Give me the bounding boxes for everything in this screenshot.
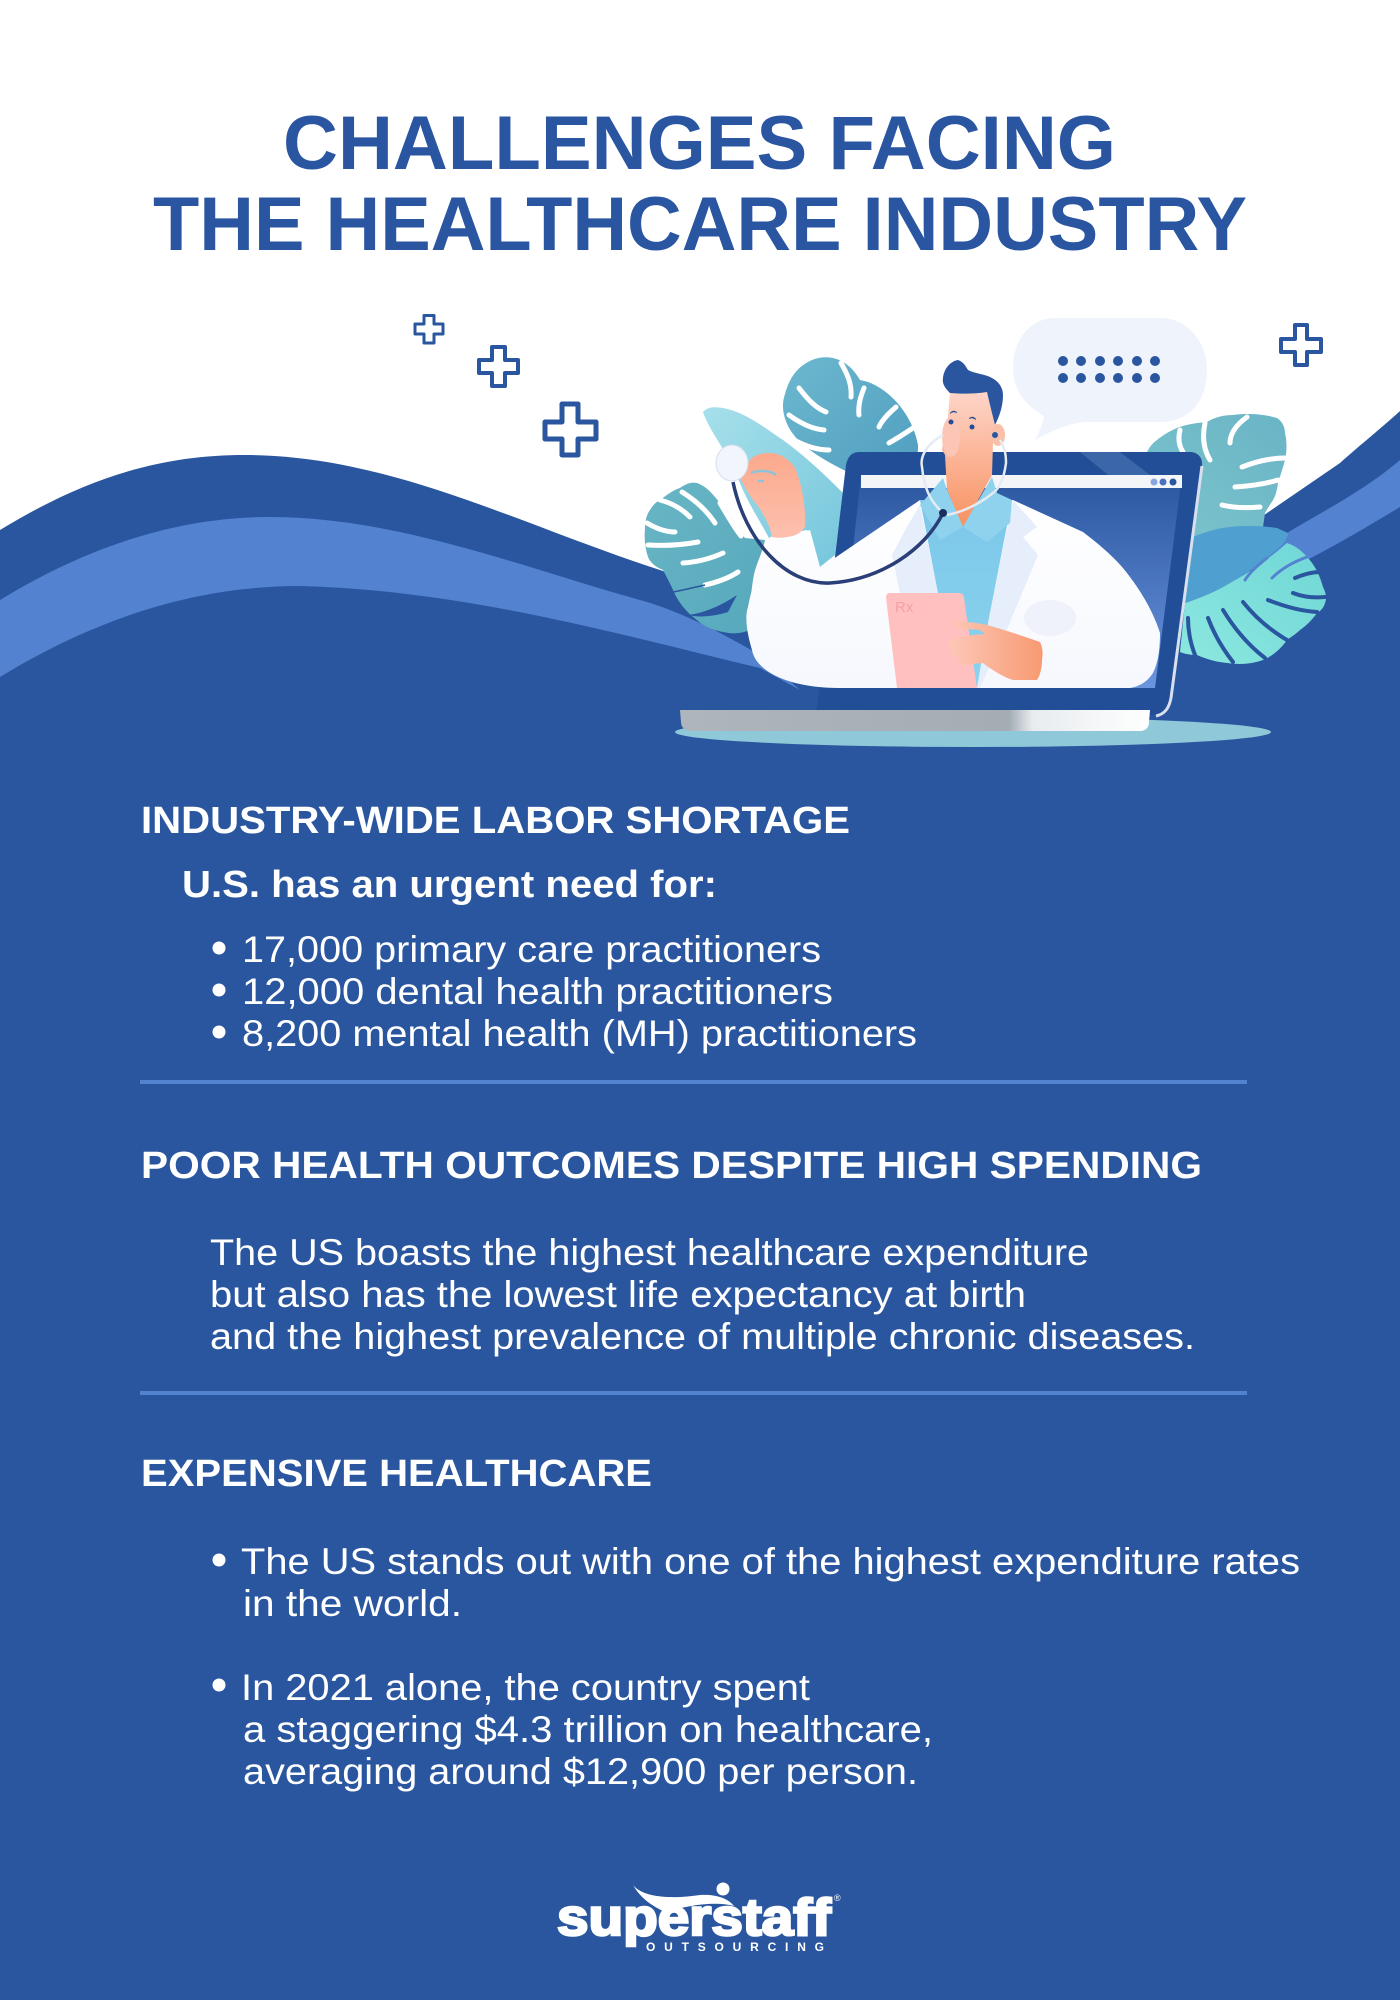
doctor (716, 360, 1160, 688)
icon: medium plus (479, 347, 518, 386)
doctor raised hand (740, 453, 805, 538)
plus icons (415, 316, 1321, 455)
clipboard (886, 593, 977, 688)
paragraph: but also has the lowest life expectancy at birth (210, 1274, 1026, 1315)
paragraph: and the highest prevalence of multiple chronic diseases. (210, 1316, 1195, 1357)
paragraph: The US boasts the highest healthcare expenditure (210, 1232, 1089, 1273)
bullet: 2021 spending: averaging around $12,900 per person. (243, 1751, 918, 1792)
bullet list: 17,000 primary care practitioners (242, 929, 821, 970)
doctor ear (991, 424, 1005, 446)
stethoscope tube (733, 482, 943, 583)
doctor eyes and brows (948, 411, 976, 430)
stethoscope chest piece (716, 445, 748, 481)
laptop base (680, 710, 1150, 731)
section: labor shortage (141, 800, 917, 1054)
doctor hair (943, 360, 1003, 425)
title: THE HEALTHCARE INDUSTRY (153, 182, 1247, 267)
laptop shadow (675, 717, 1271, 747)
bullet: 2021 spending: a staggering $4.3 trillion on healthcare, (243, 1709, 933, 1750)
clipboard: Rx (895, 599, 914, 616)
leaf: top centre (783, 357, 918, 490)
bullet list (212, 929, 917, 1054)
illustration: doctor in laptop (645, 318, 1326, 747)
doctor shirt (920, 500, 1012, 688)
bullet list: 12,000 dental health practitioners (242, 971, 833, 1012)
doctor neck and face (942, 392, 995, 527)
subheading: U.S. has an urgent need for: (182, 864, 717, 906)
leaf: right top (1147, 414, 1286, 537)
logo (557, 1882, 841, 1954)
heading: INDUSTRY-WIDE LABOR SHORTAGE (141, 800, 850, 842)
icon: large plus (545, 404, 596, 455)
title: CHALLENGES FACING (283, 101, 1116, 186)
doctor coat shading patch (1024, 600, 1076, 636)
section: poor outcomes (141, 1145, 1202, 1357)
title (153, 101, 1247, 267)
laptop screen (816, 452, 1202, 716)
icon: right plus (1281, 325, 1321, 365)
icon: small plus (415, 316, 443, 343)
doctor nose (942, 417, 960, 457)
bullet: expenditure rates: in the world. (243, 1583, 462, 1624)
logo dot (716, 1882, 730, 1896)
leaf: right bottom (1180, 543, 1326, 664)
logo registered mark: ® (834, 1893, 841, 1903)
divider (140, 1080, 1247, 1084)
stethoscope knob (939, 509, 947, 517)
bullet: expenditure rates (212, 1541, 1300, 1624)
stethoscope earpiece (922, 435, 1006, 515)
bullet list: 8,200 mental health (MH) practitioners (242, 1013, 917, 1054)
doctor hand holding clipboard (948, 622, 1043, 680)
leaf: right blue (1185, 526, 1288, 603)
speech bubble (1013, 318, 1207, 440)
doctor coat (746, 500, 1160, 688)
doctor left lapel (892, 505, 950, 688)
logo tagline: OUTSOURCING (646, 1940, 824, 1954)
divider (140, 1391, 1247, 1395)
paragraph (210, 1232, 1195, 1357)
section: expensive healthcare (141, 1453, 1300, 1792)
bullet: 2021 spending: In 2021 alone, the country spent (241, 1667, 811, 1708)
background waves (0, 411, 1400, 2000)
logo wordmark: superstaff (557, 1889, 832, 1947)
heading: EXPENSIVE HEALTHCARE (141, 1453, 652, 1495)
leaf: pale left (703, 407, 843, 567)
doctor right lapel (977, 500, 1038, 688)
leaf: left (645, 483, 765, 633)
logo swoosh (633, 1885, 734, 1912)
bullet: 2021 spending (212, 1667, 933, 1792)
doctor collar (920, 477, 1012, 542)
bullet: expenditure rates: The US stands out with one of the highest expenditure rates (241, 1541, 1300, 1582)
heading: POOR HEALTH OUTCOMES DESPITE HIGH SPENDING (141, 1145, 1202, 1187)
